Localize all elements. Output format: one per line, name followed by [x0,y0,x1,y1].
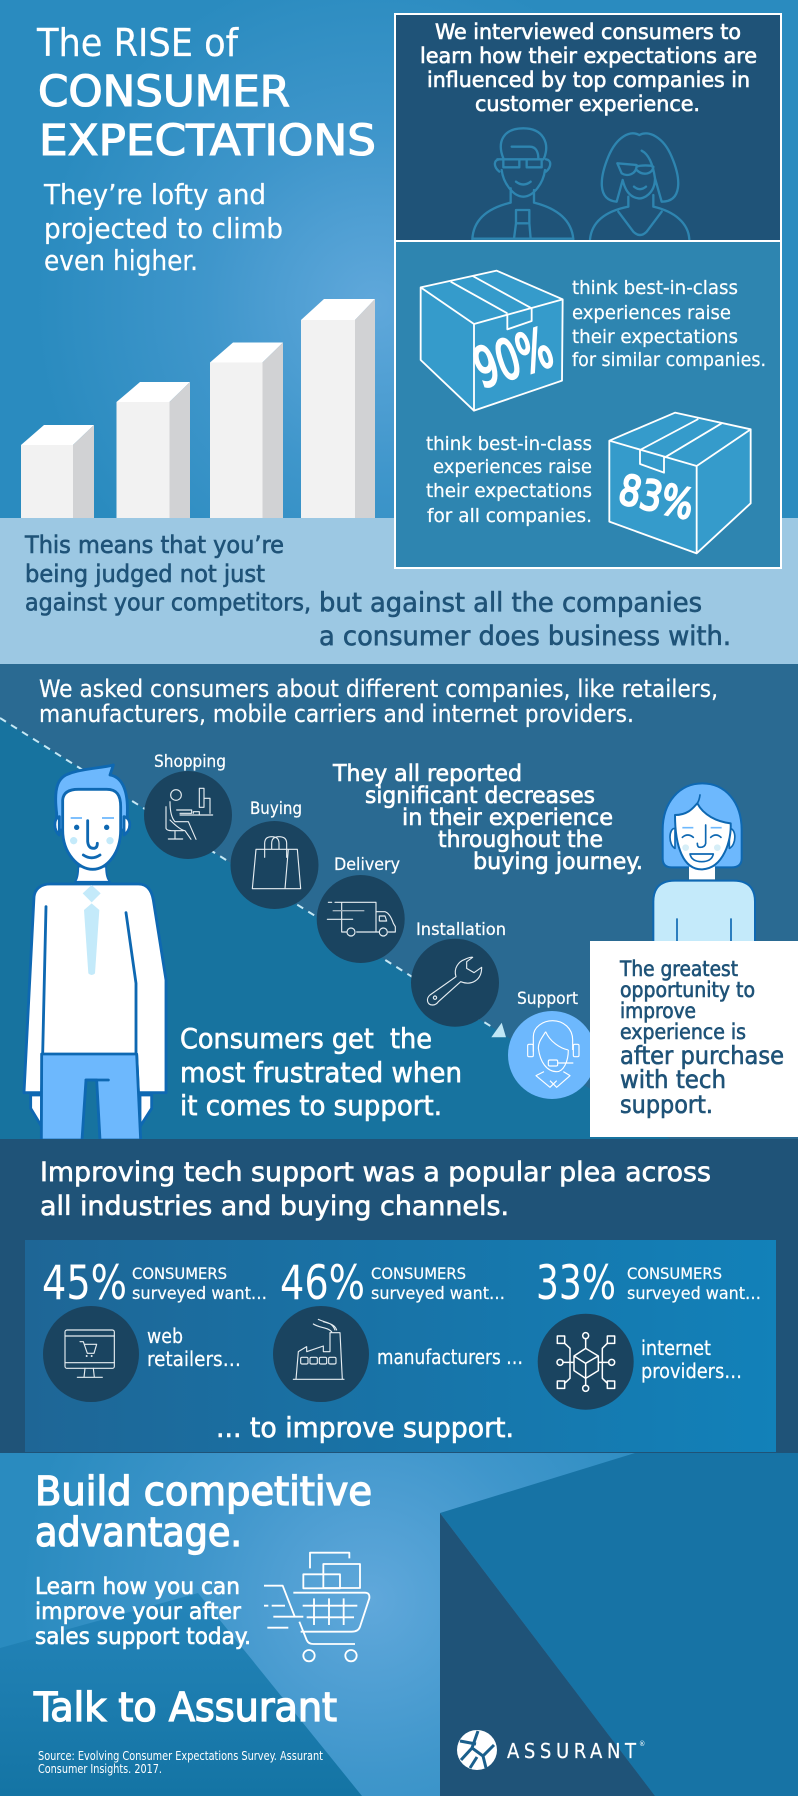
stat: web retailers: CONSUMERS [132,1264,227,1283]
icon: box 83%: 83% [614,465,699,529]
heading: tech support: Improving tech support was a popular plea across [40,1157,711,1188]
heading: build competitive advantage [35,1469,372,1556]
section background: hero [0,0,798,664]
stat: web retailers: 45% [42,1256,127,1311]
text: learn how: improve your after [35,1599,242,1625]
text: interview intro: We interviewed consumers to [435,20,741,44]
text: 90% statistic: their expectations [572,326,738,348]
icon: wrench [427,957,482,1005]
text: interview intro: customer experience. [475,92,700,116]
dashed journey arrow [0,718,506,1037]
step: delivery [317,855,405,963]
stat: manufacturers: 46% [280,1256,365,1311]
stat: internet providers: surveyed want… [627,1284,761,1304]
band text: but against all the companies [319,588,702,618]
icon: factory [293,1319,344,1379]
stat: internet providers [536,1256,761,1410]
diagonal background [0,718,670,1139]
text: asked consumers: manufacturers, mobile carriers and internet providers. [39,700,634,728]
background polygon: bottom left [0,1593,362,1796]
cta: talk to assurant: Talk to Assurant [33,1685,337,1731]
text: most frustrated [180,1022,462,1122]
source note: Consumer Insights. 2017. [38,1761,162,1776]
callout: greatest opportunity: The greatest [619,957,738,981]
callout: greatest opportunity: with tech [620,1065,726,1094]
callout: greatest opportunity [590,941,798,1137]
icon: box 90%: 90% [466,316,560,401]
band text: a consumer does business with. [319,621,731,652]
text: asked consumers: We asked consumers about different companies, like retailers, [39,675,718,703]
text: most frustrated: it comes to support. [180,1089,442,1122]
icon: box 83% [609,413,751,553]
text: reported decreases: buying journey. [473,849,643,875]
section background: buying journey [0,664,798,1139]
band text: against your competitors, [25,588,311,616]
step: installation: Installation [416,920,506,940]
icon: two consumers [472,128,689,239]
background polygon: navy triangle [440,1513,655,1796]
title: EXPECTATIONS [39,116,376,166]
text: 90% statistic: think best-in-class [572,277,738,299]
step: shopping: Shopping [154,752,226,772]
subtitle: projected to climb [44,212,283,245]
text: interview intro: learn how their expectations are [420,44,757,68]
text: most frustrated: Consumers get the [180,1022,432,1055]
illustration: woman [653,783,755,943]
icon: headset agent [528,1021,579,1087]
icon: delivery truck [327,902,395,936]
title: The RISE of [36,21,239,65]
stat: web retailers: surveyed want… [132,1284,267,1304]
band text [24,531,731,652]
text: 83% statistic: for all companies. [427,505,592,527]
subtitle [43,178,283,277]
stat: manufacturers: CONSUMERS [371,1264,466,1283]
title: CONSUMER [38,67,290,117]
stat: manufacturers: manufacturers … [377,1345,523,1369]
text: reported decreases: significant decreases [365,783,595,809]
icon: person at desk [166,788,213,839]
bar chart [21,299,375,518]
text: reported decreases: in their experience [402,805,613,831]
logo: assurant [457,1730,645,1770]
stat: internet providers: CONSUMERS [627,1264,722,1283]
stat: web retailers: retailers… [147,1347,241,1371]
background polygon: upper right [440,1453,798,1796]
light band [0,518,798,664]
step: buying: Buying [250,799,302,819]
callout: greatest opportunity: support. [620,1090,713,1119]
stat: web retailers [42,1256,267,1402]
heading: build competitive advantage: advantage. [35,1510,242,1556]
title [36,21,376,166]
panel: survey statistics [395,241,781,568]
step: installation [411,920,506,1027]
text: 90% statistic [572,277,766,371]
source note [38,1748,324,1776]
stat: internet providers: internet [641,1336,711,1360]
text: 83% statistic: their expectations [426,480,592,502]
illustration: man [24,765,166,1140]
stat: internet providers: providers… [641,1359,742,1383]
section background: call to action [0,1453,798,1796]
heading: tech support: all industries and buying channels. [40,1191,509,1222]
text: reported decreases: throughout the [438,827,603,853]
stat: web retailers: web [147,1324,183,1348]
text: 83% statistic: think best-in-class [426,433,592,455]
text: interview intro: influenced by top companies in [427,68,750,92]
subtitle: even higher. [44,244,198,277]
text: interview intro [420,20,757,116]
icon: shopping bag [252,837,301,889]
callout: greatest opportunity: after purchase [620,1041,784,1070]
section background: tech support [0,1139,798,1453]
text: learn how: Learn how you can [35,1574,240,1600]
band text: being judged not just [25,560,265,588]
band text: This means that you’re [24,531,284,559]
stat: internet providers: 33% [536,1256,616,1311]
source note: Source: Evolving Consumer Expectations Survey. Assurant [38,1748,324,1763]
icon: shopping cart [264,1553,369,1661]
text: learn how: sales support today. [35,1624,251,1650]
stat: manufacturers [273,1256,523,1402]
text: to improve support: ... to improve support. [216,1411,514,1444]
heading: tech support [40,1157,711,1222]
heading: build competitive advantage: Build competitive [35,1469,372,1515]
text: asked consumers [39,675,718,728]
text: learn how [35,1574,251,1650]
text: reported decreases: They all reported [332,761,522,787]
icon: monitor with cart [65,1330,114,1377]
text: 83% statistic: experiences raise [433,456,592,478]
logo: assurant: ASSURANT [507,1739,637,1763]
panel: interview intro [395,14,781,241]
text: 90% statistic: for similar companies. [572,349,766,371]
callout: greatest opportunity: improve [620,999,696,1023]
callout: greatest opportunity: experience is [620,1020,746,1044]
logo: assurant: ® [639,1740,645,1748]
stat: manufacturers: surveyed want… [371,1284,505,1304]
text: 90% statistic: experiences raise [572,302,731,324]
step: buying [230,799,318,909]
text: most frustrated: most frustrated when [180,1056,462,1089]
subtitle: They’re lofty and [43,178,266,211]
step: support [508,989,596,1099]
text: reported decreases [332,761,643,875]
text: 83% statistic [426,433,592,527]
step: support: Support [517,989,578,1009]
step: delivery: Delivery [334,855,400,875]
icon: box 90% [421,271,563,411]
panel: industry statistics [25,1240,776,1452]
step: shopping [144,752,232,859]
callout: greatest opportunity: opportunity to [620,978,755,1002]
icon: network cube [557,1333,615,1391]
